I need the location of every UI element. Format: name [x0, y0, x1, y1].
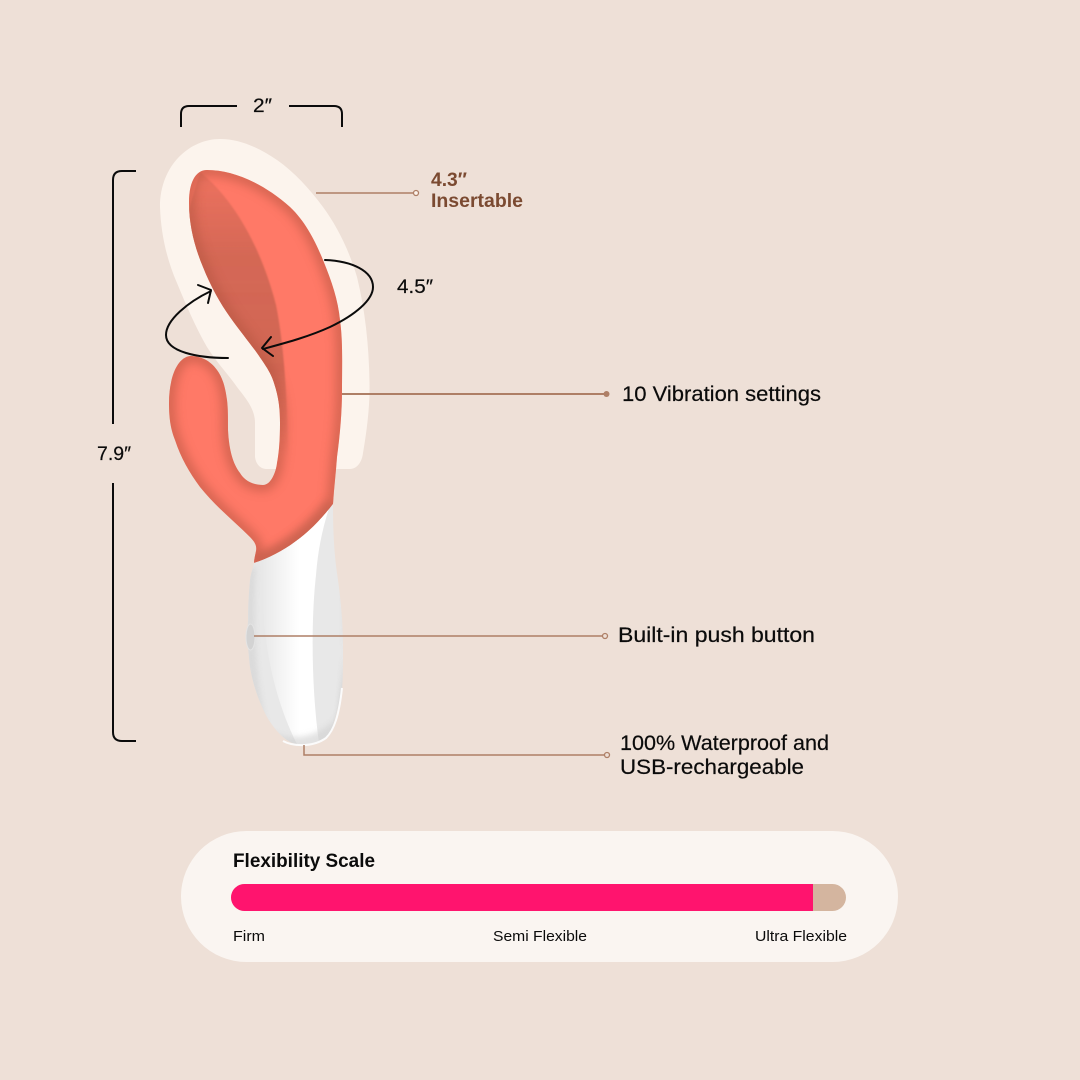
- callout: insertable length: Insertable: [431, 191, 523, 212]
- height dimension: [97, 171, 136, 741]
- scale track: [231, 884, 846, 911]
- handle base highlight: [283, 688, 342, 745]
- insertable area halo: [160, 139, 370, 469]
- width label: 2″: [253, 96, 272, 117]
- leader line: [254, 635, 603, 637]
- push button: [246, 624, 255, 650]
- leader dot: [604, 752, 610, 758]
- width dimension: [181, 96, 342, 127]
- waterproof label: 100% Waterproof and: [620, 732, 829, 755]
- rotation arrows: [166, 260, 373, 358]
- callout: push button: [254, 624, 815, 647]
- vibration label: 10 Vibration settings: [622, 383, 821, 406]
- scale labels: [233, 928, 847, 945]
- scale labels: Semi Flexible: [493, 928, 587, 945]
- scale heading: Flexibility Scale: [233, 851, 375, 872]
- insertable label: 4.3″: [431, 170, 467, 191]
- product illustration: [169, 170, 343, 746]
- scale labels: Firm: [233, 928, 265, 945]
- callout: waterproof: [304, 732, 829, 779]
- leader line: [316, 192, 414, 194]
- callout: vibration settings: [342, 383, 821, 406]
- circumference label: 4.5″: [397, 277, 433, 298]
- scale labels: Ultra Flexible: [755, 928, 847, 945]
- leader dot: [604, 391, 610, 397]
- leader dot: [414, 190, 418, 196]
- right arrow: [262, 260, 373, 356]
- coral silicone body: [169, 170, 342, 563]
- panel background: [181, 831, 898, 962]
- leader line: [304, 745, 605, 755]
- width bracket: [181, 106, 342, 127]
- left arrow: [166, 285, 228, 358]
- push button label: Built-in push button: [618, 624, 815, 647]
- height bracket: [113, 171, 136, 741]
- scale fill: [231, 884, 813, 911]
- leader line: [342, 393, 606, 395]
- white handle: [245, 500, 345, 750]
- panel: flexibility scale: [181, 831, 898, 962]
- height label: 7.9″: [97, 444, 131, 465]
- leader dot: [602, 634, 608, 638]
- callout: waterproof: USB-rechargeable: [620, 756, 804, 779]
- callout: insertable length: [316, 170, 523, 212]
